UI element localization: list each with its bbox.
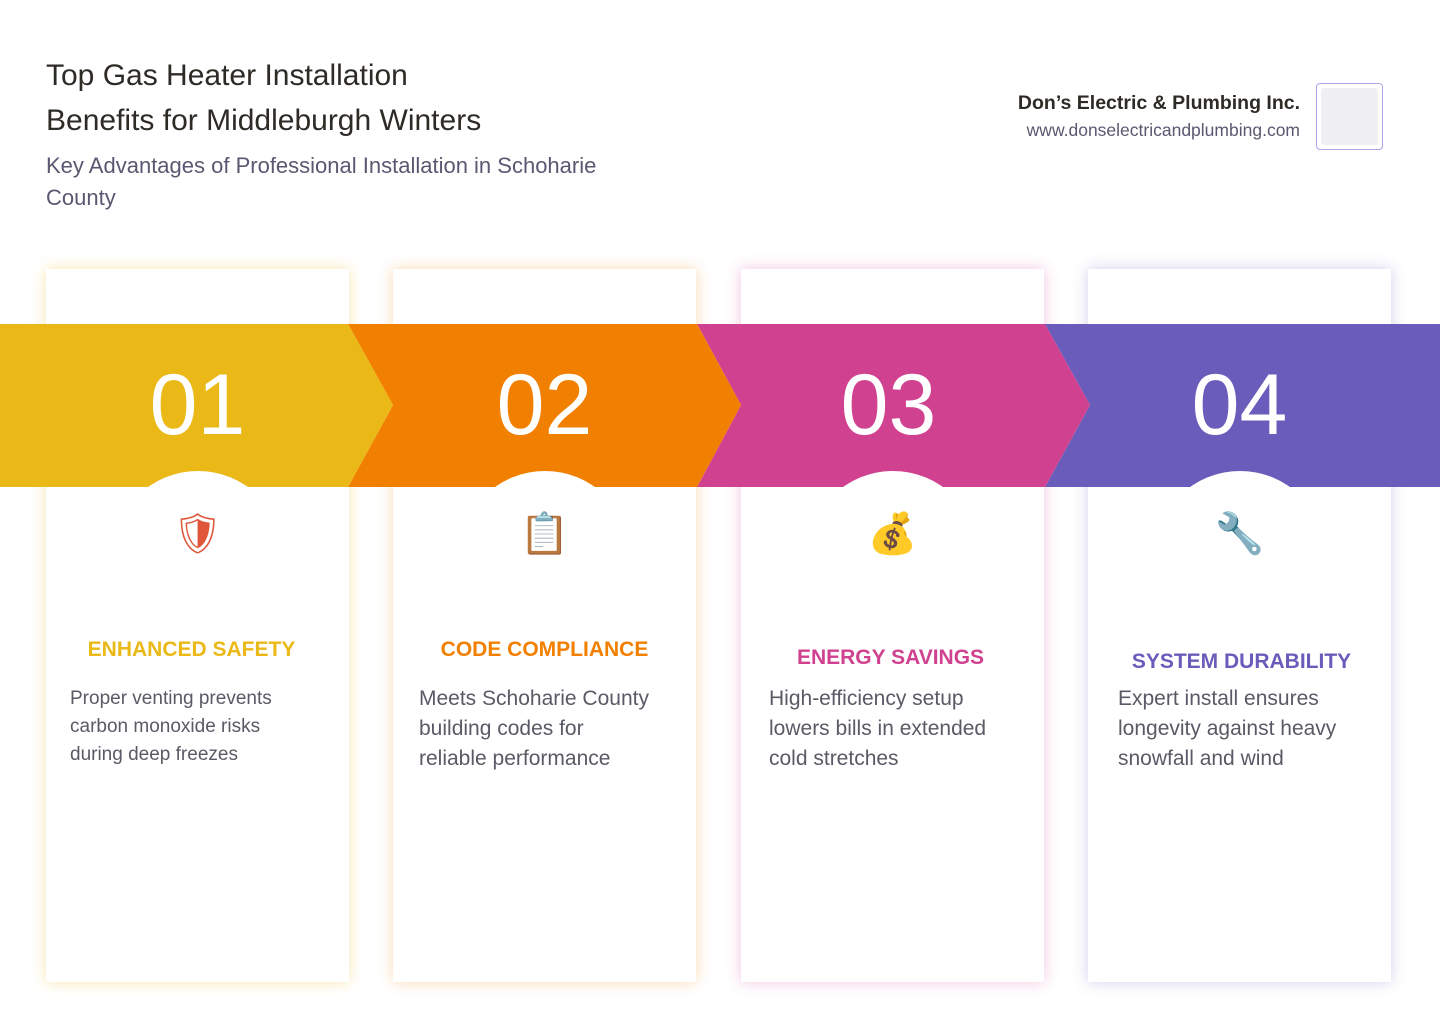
card 2 text: CODE COMPLIANCE [441,638,648,661]
card 2 text [419,638,649,770]
card 4 text: Expert install ensures [1118,687,1319,710]
brand block: Don’s Electric & Plumbing Inc. [1018,92,1300,114]
card 4 text [1118,650,1351,770]
subtitle: County [46,185,116,210]
card 4 text: snowfall and wind [1118,747,1284,770]
card 4 [1088,269,1391,982]
icon: clipboard: 📋 [520,511,569,557]
title: Benefits for Middleburgh Winters [46,104,481,137]
subtitle [46,153,596,210]
card 2 [393,269,696,982]
text: 04 [1192,357,1287,453]
card 1 text: during deep freezes [70,744,238,765]
brand block: www.donselectricandplumbing.com [1027,120,1300,140]
card 3 [741,269,1044,982]
subtitle: Key Advantages of Professional Installation in Schoharie [46,153,596,178]
card 1 text: carbon monoxide risks [70,716,260,737]
card 1 text: ENHANCED SAFETY [88,638,295,661]
card 2 text: reliable performance [419,747,610,770]
text: 02 [497,357,592,453]
circles [112,471,284,643]
text: 03 [841,357,936,453]
card 4 text: longevity against heavy [1118,717,1336,740]
card 1 text: Proper venting prevents [70,688,272,709]
numbers: 01 [150,357,245,453]
brand block [1018,92,1300,140]
card 1 [46,269,349,982]
logo box [1316,83,1383,150]
icon: shield: 🛡 [172,511,223,557]
card 3 text: High-efficiency setup [769,687,964,710]
card 3 text: ENERGY SAVINGS [797,646,984,669]
card 3 text: cold stretches [769,747,899,770]
banner arrows [0,324,1440,487]
card 3 text: lowers bills in extended [769,717,986,740]
card 4 text: SYSTEM DURABILITY [1132,650,1351,673]
title: Top Gas Heater Installation [46,59,408,92]
title [46,59,481,137]
icon: money bag: 💰 [868,511,917,557]
card 3 text [769,646,986,770]
icon: wrench: 🔧 [1215,511,1264,557]
card 1 text [70,638,295,765]
card 2 text: building codes for [419,717,584,740]
card 2 text: Meets Schoharie County [419,687,649,710]
